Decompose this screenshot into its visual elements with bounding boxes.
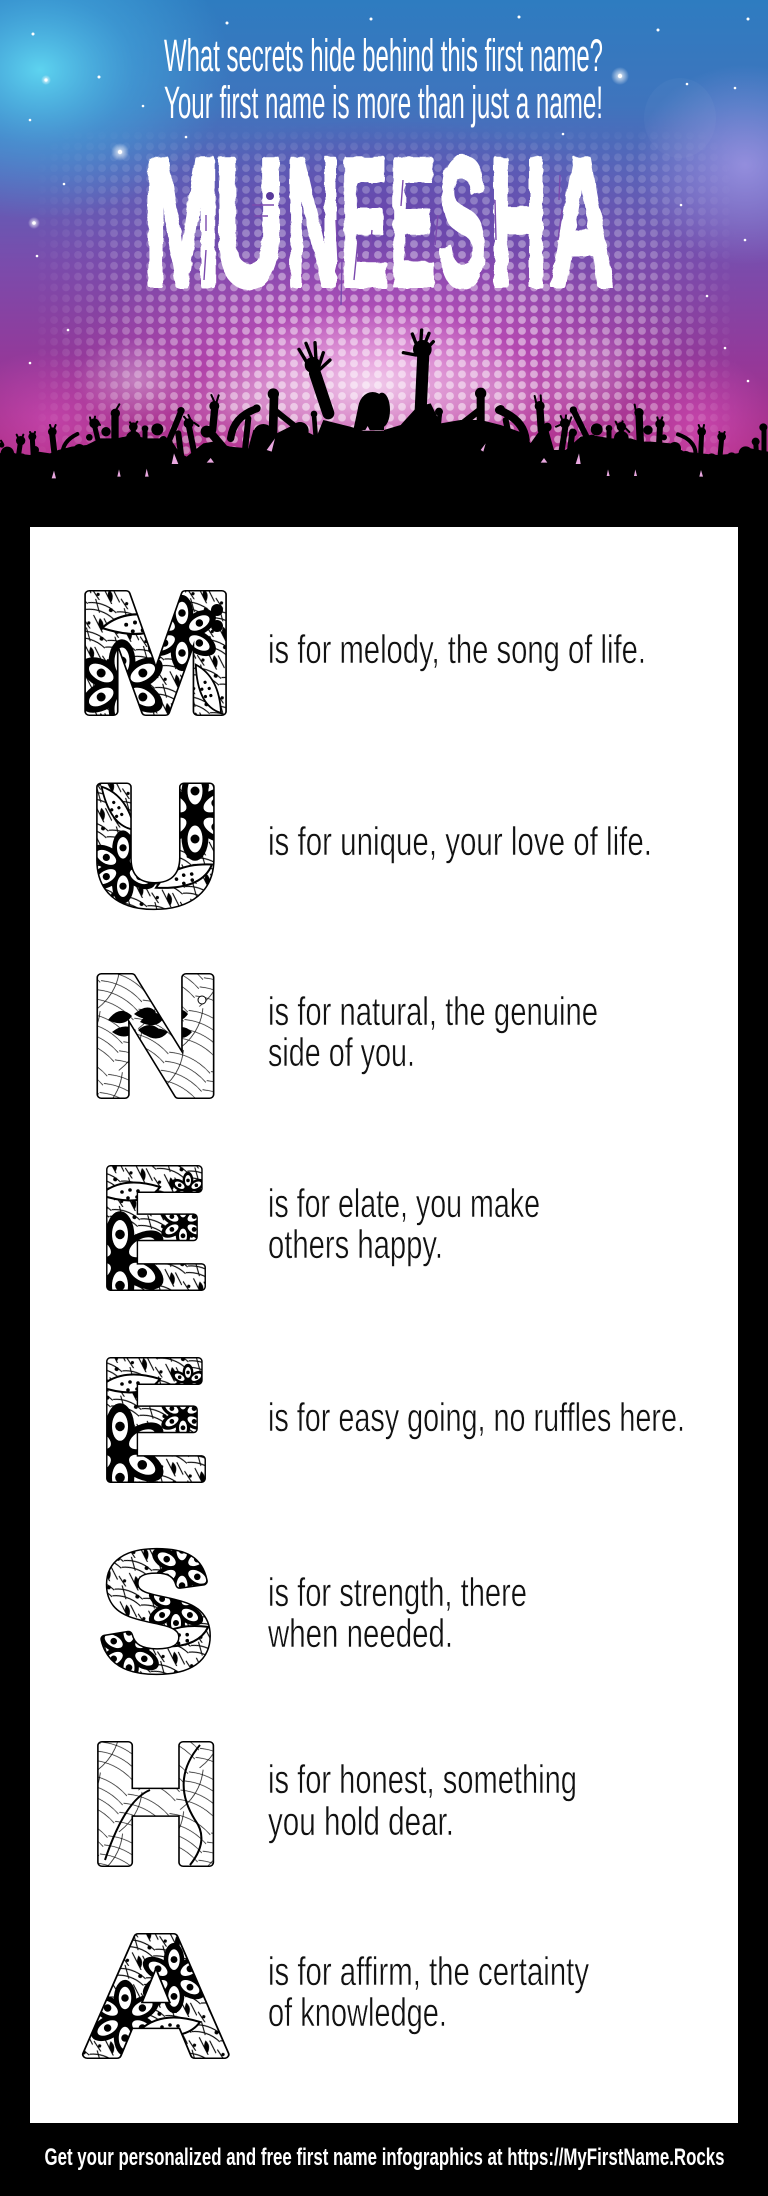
icon: letter S: S (100, 1519, 213, 1705)
icon: letter H (97, 1741, 214, 1867)
crowd: left half (0, 343, 387, 527)
icon: letter E second (106, 1357, 206, 1483)
icon: letter M (84, 590, 227, 716)
row A: letter icon and text (82, 1933, 589, 2059)
title: name MUNEESHA: N (286, 120, 340, 324)
icon: letter E second: E (100, 1326, 208, 1516)
text: S lines (267, 1571, 527, 1656)
icon: letter E: E (100, 1134, 208, 1324)
icon: letter A (82, 1933, 230, 2059)
sparkles (28, 16, 750, 382)
row N: letter icon and text (89, 942, 598, 1132)
title: name MUNEESHA: S (439, 120, 487, 324)
row E second: letter icon and text (71, 1326, 685, 1516)
text: E lines: others happy. (268, 1223, 443, 1267)
row S: letter icon and text (95, 1519, 527, 1705)
icon: letter S (100, 1548, 211, 1676)
title: name MUNEESHA: U (215, 120, 284, 324)
row U: letter icon and text (86, 751, 652, 941)
text: A lines: is for affirm, the certainty (268, 1950, 589, 1994)
icon: letter U: U (90, 751, 221, 941)
icon: letter E (106, 1165, 206, 1291)
text: H lines (268, 1758, 577, 1844)
crowd silhouette (0, 330, 768, 527)
text: E lines (268, 1182, 540, 1267)
title: name MUNEESHA (144, 120, 615, 324)
crowd: right half (374, 330, 768, 527)
row H: letter icon and text (90, 1710, 577, 1900)
text: S lines: when needed. (267, 1612, 453, 1656)
text: E lines: is for elate, you make (268, 1182, 540, 1226)
text: N lines: side of you. (268, 1031, 415, 1075)
title: name MUNEESHA: H (490, 120, 547, 324)
header: concert stage background (0, 0, 768, 457)
row M: letter icon and text (76, 558, 646, 748)
icon: letter N (96, 973, 214, 1099)
icon: letter A: A (82, 1902, 230, 2092)
white content panel (30, 527, 738, 2123)
icon: letter N: N (89, 942, 222, 1132)
title: question lines (164, 30, 603, 128)
text: A (550, 120, 614, 324)
title distress marks (204, 175, 562, 305)
title: name MUNEESHA: E (390, 120, 436, 324)
icon: letter M: M (77, 558, 235, 748)
text: S lines: is for strength, there (268, 1571, 527, 1615)
text: H lines: is for honest, something (268, 1758, 577, 1802)
icon: letter U (96, 782, 215, 910)
text: H lines: you hold dear. (268, 1800, 454, 1844)
text: N lines (268, 990, 598, 1075)
title: name MUNEESHA: M (144, 120, 220, 324)
icon: letter H: H (90, 1710, 222, 1900)
text: A lines: of knowledge. (268, 1991, 447, 2035)
text: A lines (268, 1950, 589, 2035)
row E: letter icon and text (71, 1134, 540, 1324)
text: N lines: is for natural, the genuine (268, 990, 598, 1034)
title: name MUNEESHA: E (340, 120, 388, 324)
